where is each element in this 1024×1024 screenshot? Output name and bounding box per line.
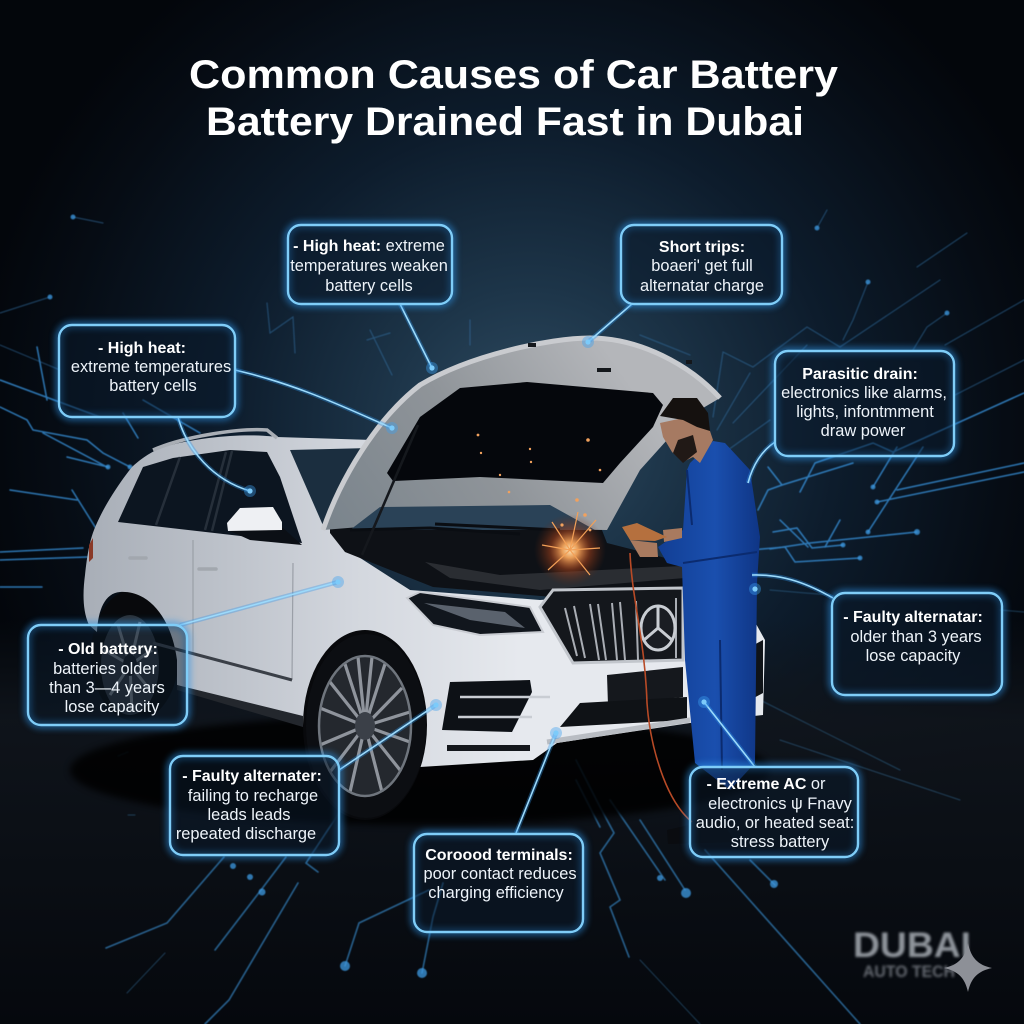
front wheel <box>306 634 426 818</box>
side air intake <box>442 680 550 732</box>
callout: old battery: lose capacity <box>65 698 160 716</box>
hood inner liner <box>387 382 663 483</box>
callout: corroded terminals: charging efficiency <box>428 884 565 902</box>
front wheel arch <box>303 630 427 820</box>
car <box>70 338 770 825</box>
background circuit lines <box>0 210 1024 1024</box>
door trim <box>153 643 292 680</box>
star emblem <box>641 606 675 650</box>
orange test cable <box>630 553 692 822</box>
callout: faulty alternator lower: repeated discharge <box>176 825 316 843</box>
sparks glow <box>534 514 606 586</box>
callout: faulty alternator lower <box>170 756 339 855</box>
callout: parasitic drain: draw power <box>821 422 906 440</box>
rear wheel <box>91 589 179 721</box>
callout: faulty alternator lower: leads leads <box>208 806 290 824</box>
window pillars <box>156 451 232 531</box>
mechanic <box>622 398 760 844</box>
multimeter <box>622 523 667 541</box>
callout: parasitic drain: electronics like alarms, <box>781 384 947 402</box>
roof rail <box>153 430 277 450</box>
callout: parasitic drain: Parasitic drain: <box>802 366 918 383</box>
callout: extreme AC: audio, or heated seat: <box>696 814 854 832</box>
running board <box>177 685 303 727</box>
callout: faulty alternator right: - Faulty alternatar: <box>843 609 983 626</box>
title: Common Causes of Car Battery <box>189 53 839 97</box>
lower slot <box>447 745 530 751</box>
callout: high heat left: - High heat: <box>98 340 186 357</box>
logo watermark <box>853 926 971 981</box>
hood latch slots <box>528 345 692 370</box>
icon: sparkle <box>944 943 992 992</box>
hood strut <box>362 425 418 555</box>
mirror base <box>228 528 302 545</box>
ground plane <box>0 620 1024 1024</box>
logo watermark: DUBAI <box>853 926 971 965</box>
callout: high heat top: temperatures weaken <box>290 257 448 275</box>
door seams <box>193 540 293 680</box>
bumper lip <box>547 720 690 742</box>
callout: extreme AC: stress battery <box>731 833 830 851</box>
side windows <box>118 450 302 543</box>
windscreen under hood <box>350 505 595 530</box>
callout: old battery: - Old battery: <box>58 641 158 658</box>
callout: high heat top <box>288 225 452 304</box>
callout: high heat left <box>59 325 235 417</box>
wipers <box>350 524 560 534</box>
callout: extreme AC <box>690 767 858 857</box>
callout: high heat left: battery cells <box>109 377 197 395</box>
callout: high heat top: - High heat: extreme <box>293 237 445 255</box>
beard <box>673 435 697 463</box>
lower vent <box>560 697 687 727</box>
door mirror <box>227 507 282 531</box>
hood <box>323 338 720 530</box>
door handles <box>130 558 216 569</box>
callout: extreme AC: - Extreme AC or <box>706 775 826 793</box>
spark particles <box>477 434 601 531</box>
title: Battery Drained Fast in Dubai <box>206 100 804 144</box>
callout: faulty alternator lower: failing to recharge <box>188 787 318 805</box>
spark rays <box>542 512 600 575</box>
windscreen <box>290 448 370 530</box>
car body <box>84 435 765 767</box>
callout: high heat top: battery cells <box>325 277 413 295</box>
neck and face <box>660 418 713 463</box>
callout: faulty alternator right: lose capacity <box>866 647 961 665</box>
connector lines <box>178 304 833 833</box>
headlight lamps <box>424 603 525 628</box>
bumper front overlays <box>407 588 763 748</box>
title <box>189 53 839 144</box>
hands <box>630 528 682 557</box>
belt and leg fold <box>683 470 757 770</box>
number plate <box>607 667 683 705</box>
callout: extreme AC: electronics ψ Fnavy <box>708 795 853 813</box>
callout: faulty alternator right <box>832 593 1002 695</box>
rear light <box>89 538 93 562</box>
callout: parasitic drain: lights, infontmment <box>796 403 934 421</box>
callout: short trips: boaeri' get full <box>651 257 753 275</box>
engine bay <box>330 525 685 597</box>
callout: high heat left: extreme temperatures <box>71 358 231 376</box>
logo watermark: AUTO TECH <box>863 962 955 981</box>
overalls <box>658 441 760 790</box>
hood edge highlight <box>323 338 720 530</box>
ground shadow <box>70 715 770 825</box>
callout: old battery: batteries older <box>53 660 157 678</box>
grille <box>540 588 683 663</box>
engine parts <box>425 562 685 590</box>
callout: corroded terminals: Coroood terminals: <box>425 847 573 864</box>
callout: corroded terminals: poor contact reduces <box>423 865 577 883</box>
callout: corroded terminals <box>414 834 583 932</box>
boots <box>667 818 735 844</box>
callout: old battery: than 3—4 years <box>49 679 165 697</box>
callout: short trips <box>621 225 782 304</box>
right side vent <box>750 640 763 700</box>
callout: short trips: Short trips: <box>659 239 745 256</box>
callout: parasitic drain <box>775 351 954 456</box>
callout: old battery <box>28 625 187 725</box>
callout: short trips: alternatar charge <box>640 277 764 295</box>
callout: faulty alternator right: older than 3 years <box>850 628 982 646</box>
callout: faulty alternator lower: - Faulty alternater: <box>182 768 322 785</box>
headlight <box>407 592 543 635</box>
hair <box>660 398 710 431</box>
